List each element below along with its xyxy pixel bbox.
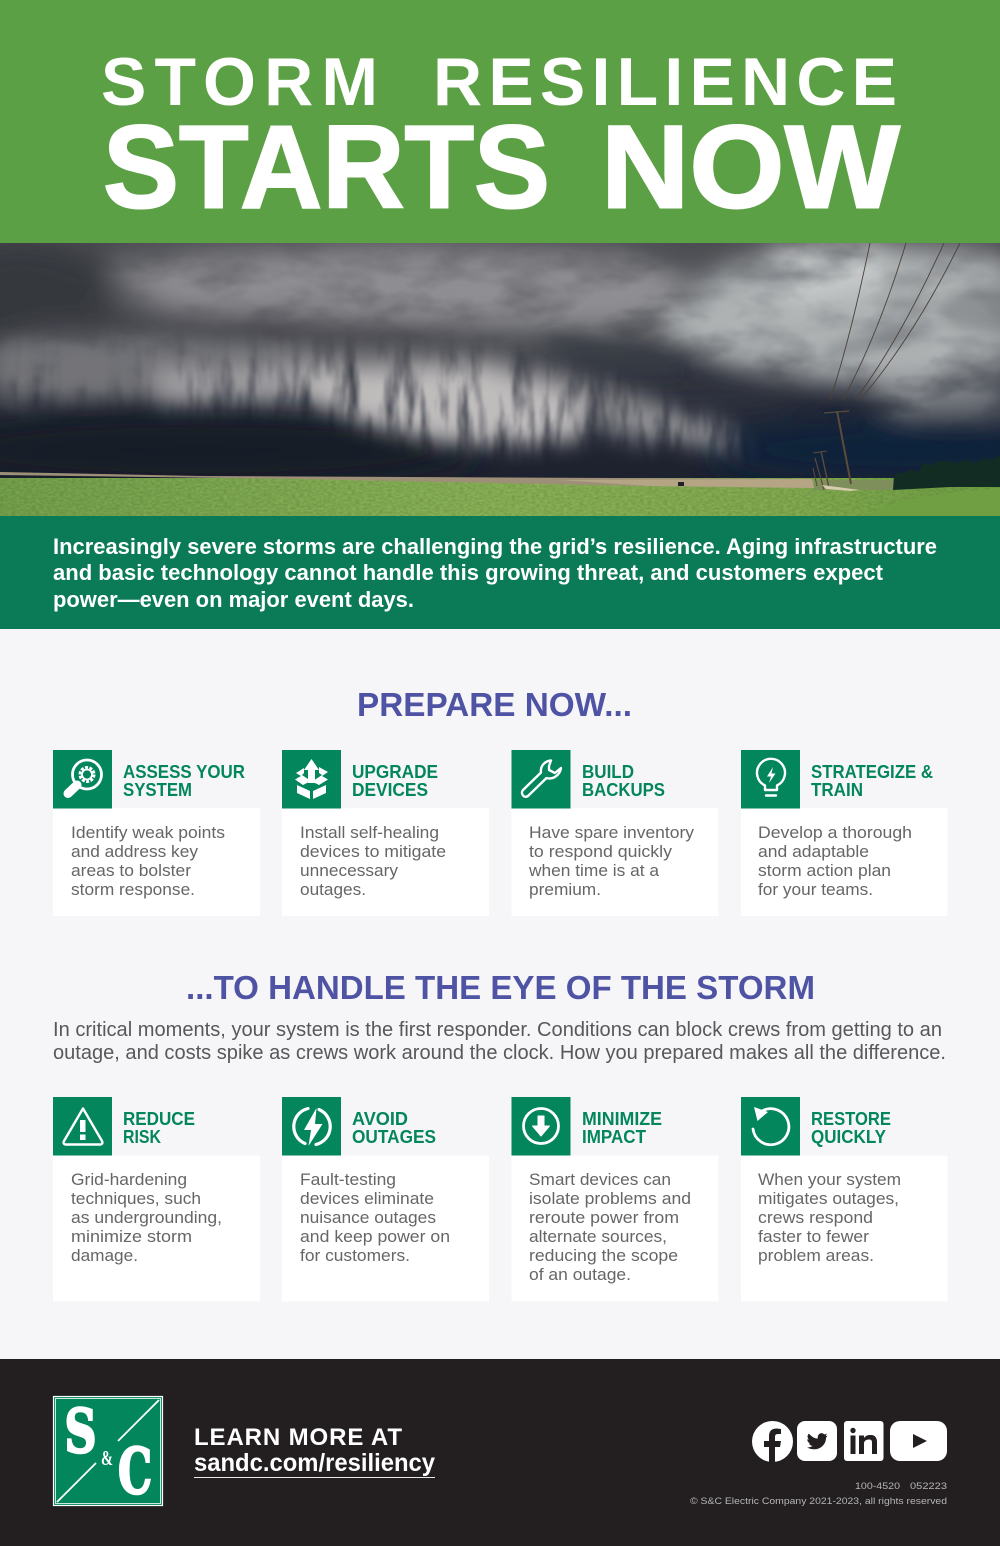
card: avoid outages [282, 1097, 489, 1302]
heading: prepare now: PREPARE NOW... [357, 686, 632, 723]
intro band: Increasingly severe storms are challenging the grid’s resilience. Aging infrastructure [53, 534, 937, 559]
card: restore quickly: QUICKLY [811, 1127, 886, 1147]
card: minimize impact: MINIMIZE [582, 1109, 662, 1129]
document number and copyright [690, 1481, 947, 1507]
card: minimize impact: isolate problems and [529, 1189, 691, 1208]
card: strategize and train: for your teams. [758, 880, 873, 899]
paragraph: first responder: In critical moments, your system is the first responder. Conditions can block crews from getting to an [53, 1019, 942, 1041]
ground [0, 478, 1000, 516]
card: strategize and train: STRATEGIZE & [811, 762, 933, 782]
icon: magnifier with gear [53, 750, 112, 808]
icon: linkedin [844, 1421, 884, 1461]
icon: warning triangle [53, 1097, 112, 1156]
card: restore quickly: problem areas. [758, 1246, 874, 1265]
card: minimize impact: of an outage. [529, 1265, 631, 1284]
icon: box with up arrow [282, 750, 341, 808]
logo: S&C: & [101, 1446, 113, 1470]
card: upgrade devices [282, 750, 489, 916]
card: upgrade devices: devices to mitigate [300, 842, 446, 861]
power lines [830, 243, 960, 400]
card: strategize and train: TRAIN [811, 780, 863, 800]
call to action [194, 1424, 435, 1478]
card: reduce risk: as undergrounding, [71, 1208, 222, 1227]
card: minimize impact: reroute power from [529, 1208, 679, 1227]
title [101, 44, 901, 234]
heading: eye of the storm: ...TO HANDLE THE EYE OF THE STORM [186, 969, 815, 1006]
card: upgrade devices: DEVICES [352, 780, 428, 800]
title: STARTS [103, 102, 550, 234]
card: build backups: Have spare inventory [529, 823, 695, 842]
intro band: and basic technology cannot handle this growing threat, and customers expect [53, 560, 884, 585]
card: build backups [512, 750, 718, 916]
card: avoid outages: OUTAGES [352, 1127, 436, 1147]
logo: S&C: C [118, 1434, 152, 1508]
icon: down arrow in circle [512, 1097, 570, 1156]
card: strategize and train: and adaptable [758, 842, 869, 861]
call to action: LEARN MORE AT [194, 1424, 402, 1451]
logo: S&C [54, 1396, 162, 1508]
card: restore quickly: faster to fewer [758, 1227, 869, 1246]
card: assess your system: and address key [71, 842, 199, 861]
title: STORM [101, 44, 378, 120]
tree line [893, 456, 1000, 490]
card: restore quickly [741, 1097, 948, 1302]
card: avoid outages: devices eliminate [300, 1189, 434, 1208]
logo: S&C: S [64, 1397, 96, 1467]
card: avoid outages: AVOID [352, 1109, 408, 1129]
card: avoid outages: and keep power on [300, 1227, 450, 1246]
card: build backups: BUILD [582, 762, 634, 782]
card: upgrade devices: outages. [300, 880, 366, 899]
card: minimize impact: alternate sources, [529, 1227, 667, 1246]
card: reduce risk: minimize storm [71, 1227, 192, 1246]
icon: wrench [512, 750, 570, 808]
icon: light bulb [741, 750, 800, 808]
card: build backups: BACKUPS [582, 780, 665, 800]
card: strategize and train: Develop a thorough [758, 823, 912, 842]
title: NOW [601, 102, 901, 234]
card: minimize impact: Smart devices can [529, 1170, 671, 1189]
card: restore quickly: crews respond [758, 1208, 873, 1227]
card: strategize and train [741, 750, 948, 916]
card: reduce risk: RISK [123, 1127, 161, 1147]
card: minimize impact: reducing the scope [529, 1246, 678, 1265]
card: upgrade devices: Install self-healing [300, 823, 439, 842]
card: assess your system: Identify weak points [71, 823, 225, 842]
call to action: sandc.com/resiliency [194, 1449, 435, 1477]
card: upgrade devices: UPGRADE [352, 762, 438, 782]
card: build backups: premium. [529, 880, 601, 899]
paragraph: first responder [53, 1019, 946, 1064]
card: reduce risk: damage. [71, 1246, 138, 1265]
utility poles [813, 411, 851, 490]
card: minimize impact: IMPACT [582, 1127, 646, 1147]
card: reduce risk [53, 1097, 260, 1302]
card: build backups: to respond quickly [529, 842, 673, 861]
card: build backups: when time is at a [528, 861, 660, 880]
card: upgrade devices: unnecessary [300, 861, 399, 880]
card: avoid outages: for customers. [300, 1246, 410, 1265]
card: restore quickly: mitigates outages, [758, 1189, 899, 1208]
document number and copyright: © S&C Electric Company 2021-2023, all rights reserved [690, 1496, 947, 1507]
card: avoid outages: nuisance outages [300, 1208, 436, 1227]
card: assess your system: ASSESS YOUR [123, 762, 245, 782]
card: minimize impact [512, 1097, 718, 1302]
card: assess your system: storm response. [71, 880, 195, 899]
card: strategize and train: storm action plan [758, 861, 891, 880]
storm photo illustration [0, 240, 1000, 516]
icon: twitter [797, 1421, 837, 1461]
footer [0, 1359, 1000, 1546]
card: restore quickly: When your system [758, 1170, 901, 1189]
intro band: power—even on major event days. [53, 587, 414, 612]
card: avoid outages: Fault-testing [300, 1170, 396, 1189]
intro band [0, 516, 1000, 629]
card: restore quickly: RESTORE [811, 1109, 891, 1129]
card: reduce risk: REDUCE [123, 1109, 195, 1129]
icon: facebook [752, 1421, 793, 1462]
document number and copyright: 052223 [910, 1481, 947, 1492]
icon: lightning in broken circle [282, 1097, 341, 1156]
card: assess your system: areas to bolster [71, 861, 191, 880]
document number and copyright: 100-4520 [855, 1481, 900, 1492]
card: assess your system [53, 750, 260, 916]
card: reduce risk: techniques, such [71, 1189, 201, 1208]
card: reduce risk: Grid-hardening [71, 1170, 187, 1189]
header banner [0, 0, 1000, 243]
icon: restore arrow [741, 1097, 800, 1156]
title: RESILIENCE [433, 44, 897, 120]
icon: youtube [890, 1421, 947, 1461]
card: assess your system: SYSTEM [123, 780, 192, 800]
paragraph: first responder: outage, and costs spike as crews work around the clock. How you prepared makes all the difference. [53, 1042, 946, 1064]
